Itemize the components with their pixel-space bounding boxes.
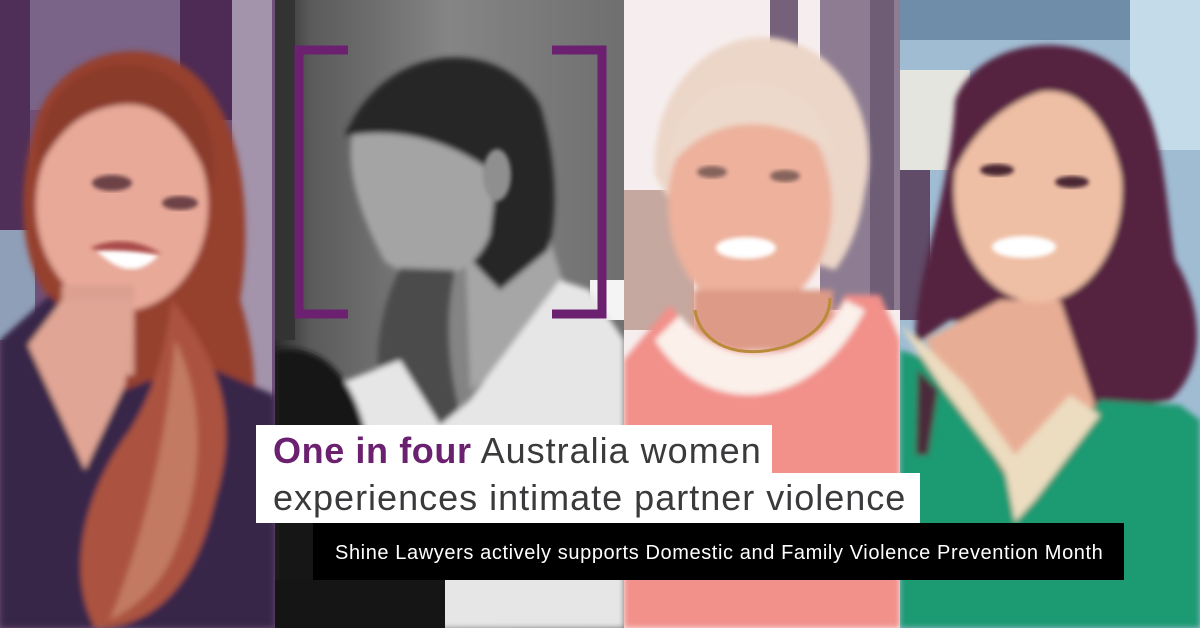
panel: woman in profile, black and white <box>275 0 624 628</box>
panel: woman in green cardigan <box>900 0 1200 628</box>
right bracket <box>552 50 602 314</box>
left bracket <box>299 50 348 314</box>
headline line two: experiences intimate partner violence <box>273 477 906 518</box>
headline <box>256 425 920 523</box>
subheading bar: Shine Lawyers actively supports Domestic and Family Violence Prevention Month <box>335 542 1103 564</box>
headline line one: One in four Australia women <box>273 430 762 471</box>
subheading bar <box>313 523 1124 580</box>
panel: woman with red hair <box>0 0 275 628</box>
panel: older woman with white hair <box>624 0 900 628</box>
